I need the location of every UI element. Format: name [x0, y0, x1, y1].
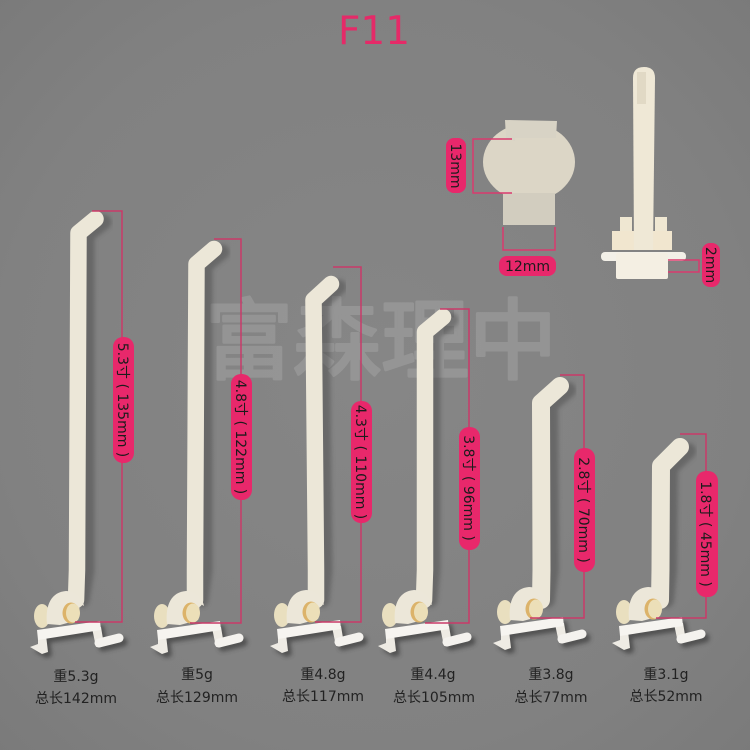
hook 3: [270, 284, 363, 657]
weight label 6: 重3.1g: [643, 667, 689, 683]
dimension: 2mm: 2mm: [702, 247, 718, 283]
length label 1: 总长142mm: [35, 691, 117, 707]
dimension: 3.8寸: 3.8寸 ( 96mm ): [460, 435, 476, 541]
dimension: 1.8寸: [656, 434, 718, 618]
length label 3: 总长117mm: [282, 689, 364, 705]
hook 1: [30, 219, 123, 658]
title: F11: [338, 9, 410, 54]
length label 2: 总长129mm: [156, 690, 238, 706]
product: side view: [601, 67, 686, 279]
dimension: 4.3寸: 4.3寸 ( 110mm ): [352, 405, 368, 519]
dimension: 13mm: [446, 138, 512, 193]
dimension: 4.8寸: 4.8寸 ( 122mm ): [232, 380, 248, 494]
dimension: 1.8寸: 1.8寸 ( 45mm ): [697, 481, 713, 587]
product: round base top view: [483, 120, 575, 225]
dimension: 12mm: 12mm: [505, 259, 550, 275]
length label 5: 总长77mm: [514, 690, 588, 706]
length label 6: 总长52mm: [629, 689, 703, 705]
dimension: 2.8寸: 2.8寸 ( 70mm ): [575, 457, 591, 563]
dimension: 4.3寸: [315, 267, 372, 622]
dimension: 3.8寸: [425, 309, 480, 623]
dimension: 2mm: [668, 243, 720, 287]
hook 5: [493, 386, 586, 654]
watermark: 富森理中: [205, 271, 557, 398]
dimension: 5.3寸: 5.3寸 ( 135mm ): [114, 343, 130, 457]
weight label 3: 重4.8g: [300, 667, 346, 683]
hook 6: [612, 447, 705, 654]
dimension: 12mm: [499, 227, 556, 276]
weight label 1: 重5.3g: [53, 669, 99, 685]
length label 4: 总长105mm: [393, 690, 475, 706]
dimension: 13mm: 13mm: [447, 143, 463, 189]
dimension: 5.3寸: [75, 211, 134, 622]
hook 4: [378, 317, 471, 657]
weight label 2: 重5g: [181, 667, 213, 683]
weight label 4: 重4.4g: [410, 667, 456, 683]
dimension: 2.8寸: [530, 375, 595, 618]
weight label 5: 重3.8g: [528, 667, 574, 683]
dimension: 4.8寸: [190, 239, 252, 623]
hook 2: [150, 249, 243, 658]
